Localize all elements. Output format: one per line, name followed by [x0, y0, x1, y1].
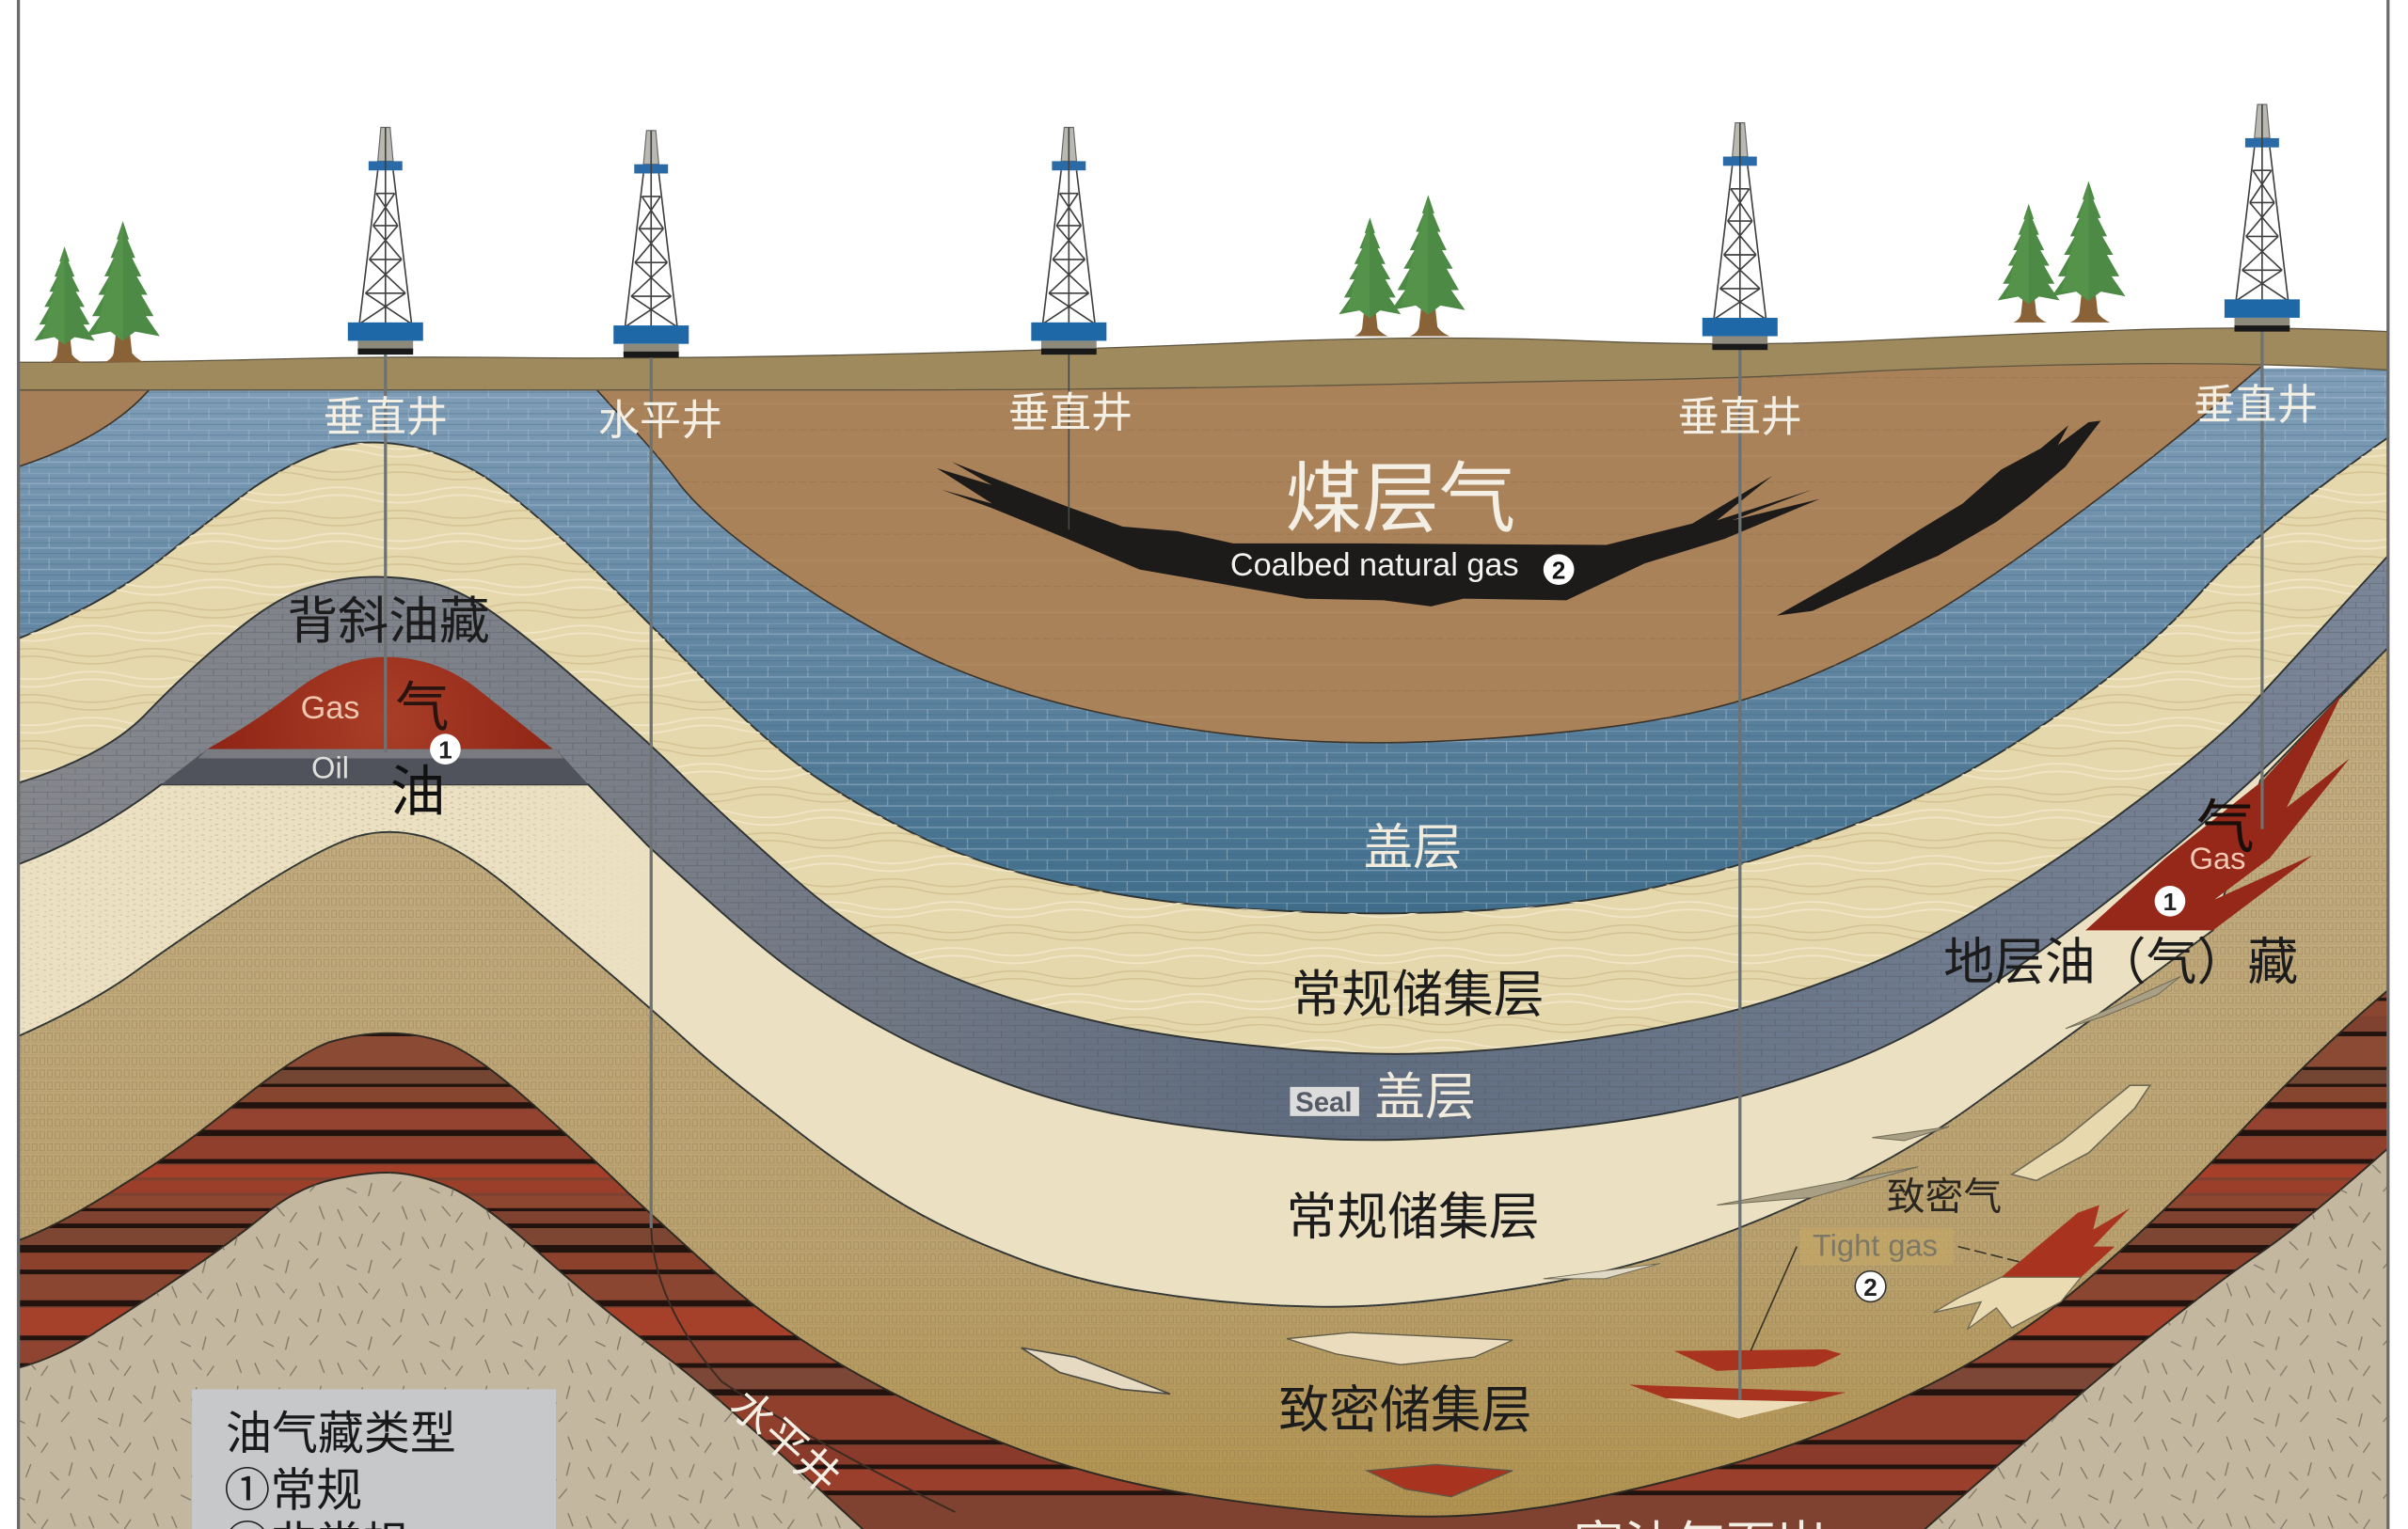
legend: reservoir types — [192, 1389, 556, 1529]
geological cross-section — [19, 328, 2388, 1529]
icon: trees middle — [1339, 195, 1465, 337]
tight gas slivers along the sand base — [1544, 976, 2180, 1279]
label: stratigraphic reservoir: 地层油（气）藏 — [1943, 935, 2298, 991]
badge: 2 coalbed: 2 — [1552, 556, 1565, 584]
label: upper conventional reservoir: 常规储集层 — [1291, 967, 1545, 1023]
legend title: 油气藏类型 — [226, 1409, 456, 1459]
label: anticline reservoir: 背斜油藏 — [287, 593, 490, 650]
label: tight gas chinese: 致密气 — [1887, 1174, 2002, 1218]
icon: drilling rig 2 — [613, 131, 689, 357]
label: seal english badge: Seal — [1295, 1087, 1353, 1118]
badge: 2 coalbed — [1544, 554, 1574, 585]
layer: shale outline — [19, 990, 2388, 1517]
well: vertical through tight gas — [1739, 347, 1741, 1400]
label: gas chinese: 气 — [395, 678, 450, 738]
well: horizontal — [651, 356, 956, 1512]
tight gas lenses on the well — [1629, 1349, 1846, 1418]
label: middle seal: 盖层 — [1374, 1069, 1476, 1126]
ground surface strip — [19, 328, 2388, 390]
well: vertical at coal seam — [1068, 353, 1069, 529]
trap: anticline oil band — [161, 749, 588, 784]
badge: 2 tight gas — [1855, 1271, 1886, 1301]
layer: upper blue seal — [20, 369, 2387, 912]
icon: drilling rig 3 — [1031, 128, 1106, 355]
tight reservoir lens: cream center — [1287, 1332, 1513, 1364]
label: tight gas english: Tight gas — [1813, 1227, 1938, 1262]
trap: stratigraphic gas accumulation — [2085, 694, 2350, 930]
icon: trees left — [34, 221, 160, 362]
label: oil chinese: 油 — [390, 762, 445, 823]
tight reservoir lens: cream left — [1022, 1348, 1170, 1394]
layer: brown coal-bearing basin — [19, 350, 2280, 743]
coal seam right streak — [1777, 420, 2100, 616]
label: upper seal: 盖层 — [1364, 821, 1462, 875]
legend item: conventional: ①常规 — [224, 1466, 362, 1517]
label: stratigraphic gas english: Gas — [2190, 841, 2245, 875]
badge: 1 anticline — [430, 733, 461, 764]
badge: 1 stratigraphic: 1 — [2163, 888, 2177, 916]
tight reservoir lens: red lower — [1367, 1464, 1513, 1497]
tight gas body: red and cream fractured lens — [1934, 1206, 2130, 1330]
badge: 1 anticline: 1 — [438, 735, 452, 764]
trap: anticline gas cap — [207, 657, 553, 749]
icon: drilling rig 4 — [1703, 123, 1778, 350]
icon: trees right — [1998, 181, 2126, 323]
heading: coalbed gas: 煤层气 — [1286, 456, 1515, 542]
frame right edge — [2386, 0, 2389, 1529]
label: vertical well 5: 垂直井 — [2194, 383, 2318, 429]
layer: middle slate seal — [20, 556, 2387, 1140]
label: tight reservoir: 致密储集层 — [1278, 1382, 1532, 1439]
label: lower conventional reservoir: 常规储集层 — [1286, 1190, 1540, 1246]
badge: 2 tight gas: 2 — [1863, 1273, 1877, 1301]
layer: granite basement — [19, 1148, 2388, 1529]
tight gas body: cream streak — [2012, 1085, 2150, 1180]
layer: upper conventional reservoir sand — [20, 437, 2387, 1053]
icon: drilling rig 5 — [2225, 104, 2300, 332]
well: vertical at anticline — [385, 355, 387, 752]
frame left edge — [17, 0, 20, 1529]
layer: tight reservoir tan — [19, 648, 2388, 1529]
label: gas english: Gas — [301, 690, 359, 726]
sand texture at dome — [19, 786, 660, 1044]
label: oil english: Oil — [311, 750, 349, 785]
label: vertical well 1: 垂直井 — [324, 395, 448, 441]
well: vertical at stratigraphic trap — [2261, 330, 2263, 829]
label: vertical well 4: 垂直井 — [1678, 395, 1802, 441]
label: coalbed natural gas: Coalbed natural gas — [1230, 547, 1519, 583]
label: vertical well 3: 垂直井 — [1008, 390, 1133, 436]
tight gas leader lines — [1751, 1247, 2020, 1351]
coal seam main body — [937, 462, 1820, 607]
label: stratigraphic gas chinese: 气 — [2196, 796, 2255, 860]
badge: 1 stratigraphic — [2155, 886, 2185, 917]
icon: drilling rig 1 — [348, 128, 423, 355]
label: horizontal well top: 水平井 — [598, 398, 722, 444]
label: horizontal well lateral: 水平井 — [721, 1380, 849, 1503]
layer: organic-rich shale stripes — [19, 967, 2388, 1529]
layer: lower conventional reservoir sand — [20, 649, 2386, 1306]
